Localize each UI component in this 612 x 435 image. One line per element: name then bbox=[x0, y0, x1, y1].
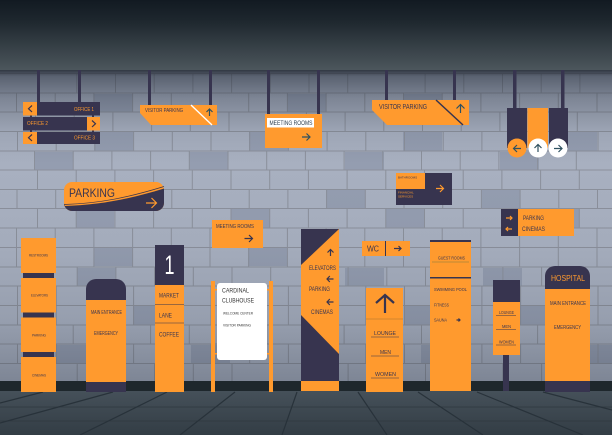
totem: four stacked room blocks: CINEMAS bbox=[32, 373, 47, 377]
floor bbox=[0, 381, 612, 435]
sign: cardinal clubhouse white board on posts bbox=[211, 281, 273, 392]
sign: small financial services panel: FINANCIAL bbox=[398, 190, 414, 194]
sign: visitor parking hanging left bbox=[140, 70, 217, 125]
sign: hanging office directory: OFFICE 2 bbox=[27, 121, 48, 127]
sign: parking and cinemas panel: PARKING bbox=[523, 216, 544, 222]
totem: number one market lane coffee: 1 bbox=[164, 250, 174, 280]
sign: hanging office directory: OFFICE 1 bbox=[74, 107, 94, 113]
totem: guest rooms: GUEST ROOMS bbox=[438, 256, 465, 261]
totem: elevators parking cinemas diagonal: PARKING bbox=[309, 287, 330, 293]
totem: main entrance arched: MAIN ENTRANCE bbox=[91, 310, 122, 316]
totem: number one market lane coffee: MARKET bbox=[159, 292, 179, 299]
sign: visitor parking hanging right bbox=[372, 70, 469, 125]
totem: lounge men women with up arrow bbox=[366, 288, 403, 392]
totem: pole directory: LOUNGE bbox=[499, 310, 514, 315]
totem: elevators parking cinemas diagonal bbox=[301, 229, 339, 391]
totem: number one market lane coffee: COFFEE bbox=[159, 331, 179, 338]
totem: hospital bbox=[545, 266, 590, 392]
brick wall bbox=[0, 70, 612, 383]
totem: main entrance arched bbox=[86, 279, 126, 392]
totem: guest rooms: FITNESS bbox=[434, 303, 449, 308]
totem: pole directory: WOMEN bbox=[499, 340, 514, 345]
sign: meeting rooms panel: MEETING ROOMS bbox=[216, 224, 254, 230]
sign: parking curved panel bbox=[64, 182, 164, 211]
sign: cardinal clubhouse white board on posts: CLUBHOUSE bbox=[222, 298, 254, 305]
totem: pole directory bbox=[493, 280, 520, 391]
sign: cardinal clubhouse white board on posts: VISITOR PARKING bbox=[223, 324, 251, 328]
totem: lounge men women with up arrow: LOUNGE bbox=[374, 331, 396, 337]
sign: meeting rooms hanging: MEETING ROOMS bbox=[270, 120, 312, 127]
totem: four stacked room blocks: RESTROOMS bbox=[29, 253, 48, 257]
sign: small financial services panel: BATHROOMS bbox=[398, 176, 417, 180]
totem: guest rooms bbox=[430, 240, 471, 391]
totem: hospital: EMERGENCY bbox=[554, 325, 581, 331]
totem: pole directory: MEN bbox=[502, 324, 511, 329]
totem: number one market lane coffee bbox=[155, 245, 184, 392]
sign: visitor parking hanging left: VISITOR PARKING bbox=[145, 108, 183, 114]
totem: elevators parking cinemas diagonal: CINEMAS bbox=[311, 310, 333, 316]
totem: guest rooms: SWIMMING POOL bbox=[434, 287, 467, 292]
totem: four stacked room blocks bbox=[21, 238, 56, 392]
sign: three-bar hanging with round arrows bbox=[507, 70, 568, 158]
sign: hanging office directory: OFFICE 3 bbox=[74, 136, 95, 142]
sign: meeting rooms panel bbox=[212, 220, 263, 248]
sign: wc panel: WC bbox=[367, 244, 379, 254]
ceiling band bbox=[0, 0, 612, 70]
totem: guest rooms: SAUNA bbox=[434, 318, 447, 323]
sign: parking curved panel: PARKING bbox=[69, 186, 115, 200]
totem: four stacked room blocks: PARKING bbox=[32, 333, 46, 337]
sign: parking and cinemas panel bbox=[501, 209, 574, 236]
totem: lounge men women with up arrow: MEN bbox=[380, 350, 391, 356]
sign: small financial services panel bbox=[396, 173, 452, 205]
sign: parking and cinemas panel: CINEMAS bbox=[522, 227, 545, 233]
totem: four stacked room blocks: ELEVATORS bbox=[31, 293, 48, 297]
sign: small financial services panel: SERVICES bbox=[398, 194, 413, 198]
totem: number one market lane coffee: LANE bbox=[159, 312, 172, 319]
totem: hospital: MAIN ENTRANCE bbox=[550, 301, 586, 307]
sign: visitor parking hanging right: VISITOR PARKING bbox=[379, 102, 427, 111]
sign: cardinal clubhouse white board on posts: CARDINAL bbox=[222, 288, 249, 295]
totem: elevators parking cinemas diagonal: ELEVATORS bbox=[309, 266, 336, 272]
totem: lounge men women with up arrow: WOMEN bbox=[375, 372, 396, 378]
sign: cardinal clubhouse white board on posts: WELCOME CENTER bbox=[223, 312, 253, 316]
sign: meeting rooms hanging bbox=[265, 70, 322, 148]
totem: hospital: HOSPITAL bbox=[551, 273, 585, 283]
sign: hanging office directory bbox=[23, 70, 100, 144]
sign: wc panel bbox=[362, 241, 410, 256]
totem: main entrance arched: EMERGENCY bbox=[94, 331, 118, 337]
